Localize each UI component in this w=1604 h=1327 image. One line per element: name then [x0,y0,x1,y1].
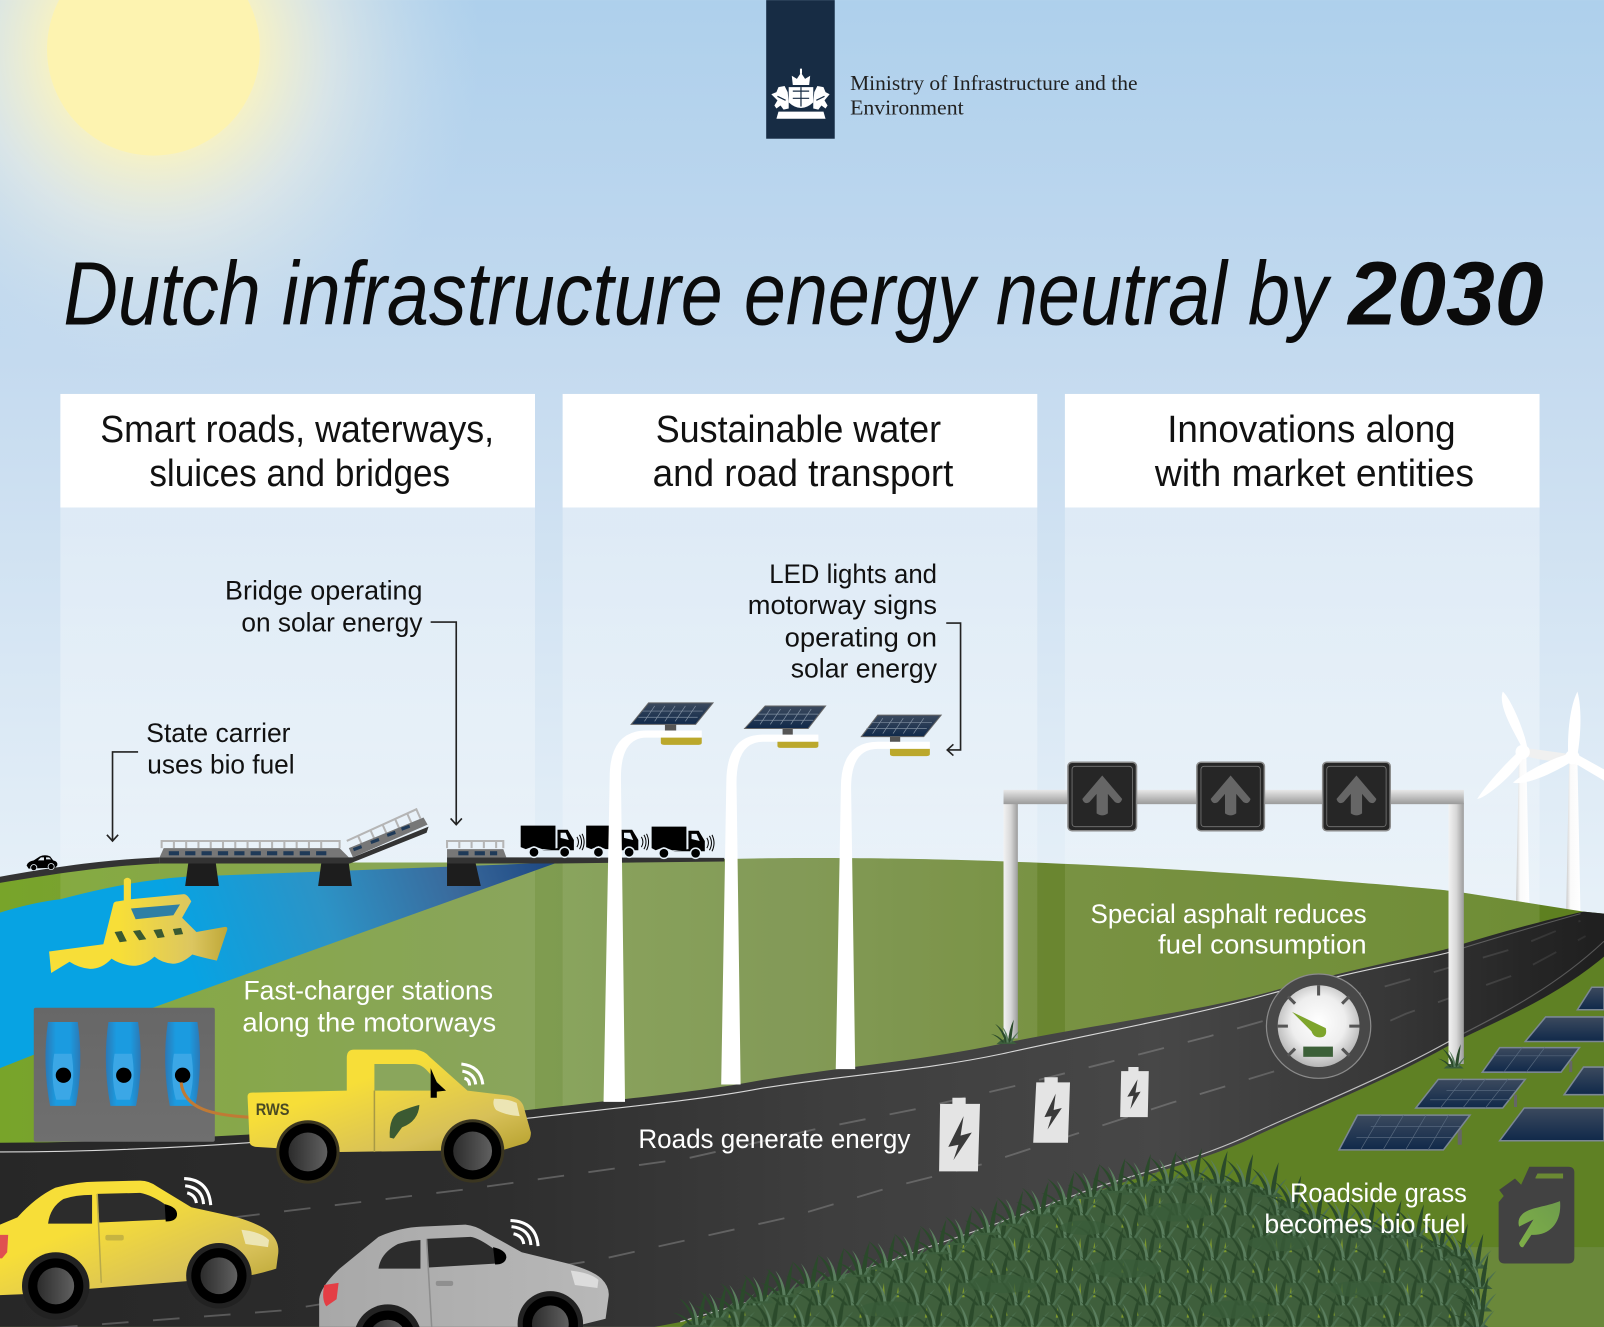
heading: innovations: Innovations along [1167,409,1456,451]
truck 2 [586,826,649,857]
ministry name [850,71,1138,120]
sign 3 [1323,762,1390,831]
label: LED lights: motorway signs [748,590,937,620]
icon: battery large [939,1098,980,1171]
pickup truck [248,1050,531,1184]
label: state carrier [146,718,295,779]
sign 2 [1197,762,1264,831]
label: bridge: Bridge operating [225,576,422,606]
label: fast chargers [242,976,496,1037]
charging cable [181,1082,249,1117]
label: fast chargers: along the motorways [242,1007,496,1037]
label: roadside grass: Roadside grass [1290,1178,1467,1208]
charger 1 [45,1022,80,1106]
solar field [1339,987,1604,1150]
label: roadside grass [1264,1178,1467,1239]
label: special asphalt: fuel consumption [1158,930,1367,960]
label: special asphalt [1090,899,1367,960]
bridge and upper road [0,809,724,886]
label: roads generate energy: Roads generate energy [638,1124,911,1154]
label: LED lights: solar energy [791,653,938,683]
truck 1 [521,826,584,857]
heading: sustainable transport [563,394,1037,507]
heading: smart roads: sluices and bridges [149,453,450,495]
heading: sustainable transport: and road transport [653,453,954,495]
label: state carrier: State carrier [146,718,291,748]
road edge lines [0,914,1604,1322]
ministry name: Ministry of Infrastructure and the [850,71,1138,95]
label: LED lights: LED lights and [769,559,937,589]
label: roadside grass: becomes bio fuel [1264,1209,1466,1239]
heading: innovations [1065,394,1540,507]
lamp 3 [836,715,941,1069]
panel: column sky backgrounds [60,507,1540,917]
charger 3 [165,1022,200,1106]
icon: battery small [1120,1067,1149,1117]
sign 1 [1068,762,1137,831]
icon: trucks [521,826,714,858]
heading: sustainable transport: Sustainable water [656,409,941,451]
heading: innovations: with market entities [1154,453,1474,495]
label: fast chargers: Fast-charger stations [243,976,493,1006]
wind turbines [1477,692,1604,913]
title: Dutch infrastructure energy neutral by [63,244,1332,344]
water canal [0,862,558,1068]
icon: small car [27,855,57,871]
road surface [0,912,1604,1327]
grass verge [655,1148,1497,1327]
lamp 2 [721,706,826,1084]
yellow car [0,1179,278,1320]
lamp 1 [604,703,713,1102]
label: bridge: on solar energy [241,607,423,637]
label: state carrier: uses bio fuel [147,749,295,779]
ministry name: Environment [850,96,964,120]
arrow: state carrier [107,752,138,841]
icon: jerrycan [1499,1167,1574,1263]
panel: column ground overlays [60,858,1540,1142]
icon: fuel gauge [1266,974,1371,1078]
charging station [34,1008,215,1142]
label: LED lights: operating on [785,623,937,653]
motorway sign gantry [991,762,1467,1068]
label: bridge [225,576,423,637]
sun [0,0,481,377]
lane dashes [0,921,1586,1327]
logo block [766,0,835,139]
green landscape [0,858,1604,1327]
heading: smart roads: Smart roads, waterways, [100,409,494,451]
icon: state carrier boat [49,878,227,973]
grey car [319,1221,609,1327]
pickup truck: RWS [256,1101,290,1119]
title: 2030 [1346,244,1544,344]
icon: battery medium [1033,1077,1070,1143]
arrow: LED lights [946,623,961,756]
lower right verge [655,957,1604,1327]
heading: smart roads [60,394,535,507]
truck 3 [652,827,714,858]
label: LED lights [748,559,938,683]
arrow: bridge [431,622,462,825]
charger 2 [106,1022,141,1106]
label: special asphalt: Special asphalt reduces [1090,899,1367,929]
